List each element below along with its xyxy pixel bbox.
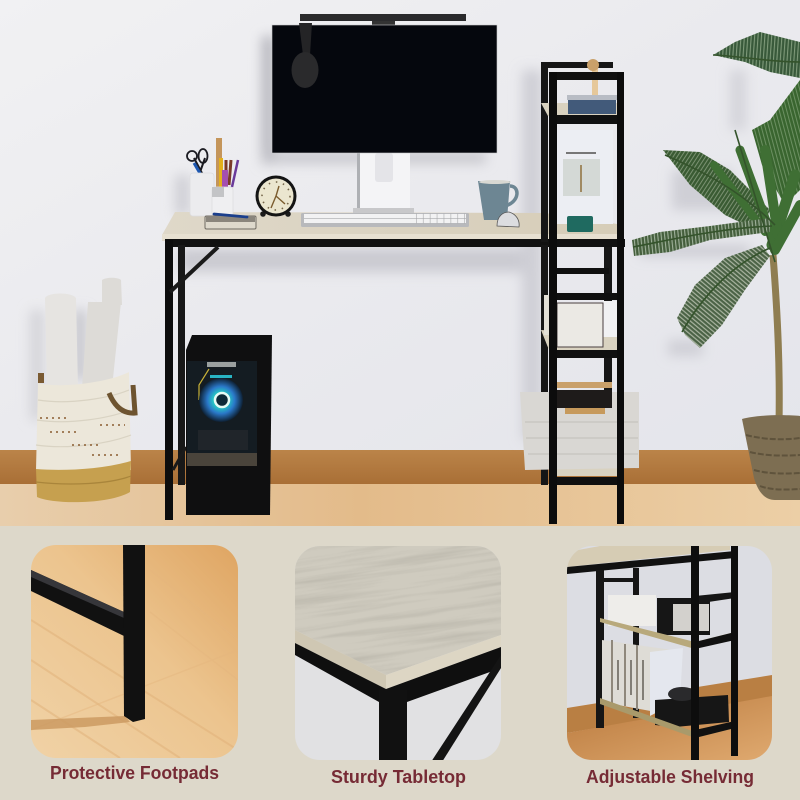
front rungs	[549, 72, 624, 485]
frond: top	[713, 32, 800, 78]
front legs	[549, 72, 557, 524]
white box	[608, 595, 656, 626]
wood front edge	[295, 630, 386, 689]
wood grain	[295, 546, 501, 670]
wall	[567, 546, 772, 708]
desk front edge	[162, 234, 617, 240]
top shelf books and ornament	[567, 59, 617, 114]
lower shelf	[600, 698, 735, 738]
floor	[567, 696, 772, 760]
shelf wood boards	[541, 103, 617, 476]
panel: protective footpads	[31, 545, 238, 758]
desk apron	[165, 239, 625, 247]
frond: upper right	[752, 80, 800, 205]
frond: center blades	[714, 150, 800, 250]
caption: adjustable shelving: Adjustable Shelving	[586, 767, 754, 787]
wall shadows	[30, 36, 750, 440]
baseboard	[0, 450, 800, 484]
back legs and rails	[596, 568, 735, 728]
keyboard	[301, 208, 469, 227]
monitor	[272, 25, 497, 153]
wall	[0, 0, 800, 451]
small desk ornament	[497, 212, 519, 227]
white storage box	[544, 295, 617, 347]
notebook and pen	[205, 214, 256, 229]
frond: low left	[632, 218, 770, 256]
books	[602, 640, 683, 716]
monitor light bar	[300, 14, 466, 26]
caption: sturdy tabletop: Sturdy Tabletop	[331, 767, 466, 787]
back frame	[541, 62, 613, 485]
room scene photo	[0, 0, 800, 526]
coffee mug	[478, 180, 517, 220]
headphones	[292, 23, 318, 88]
desk left back leg	[178, 245, 185, 485]
frond stems	[633, 55, 800, 332]
monitor stand	[357, 153, 410, 211]
caption: protective footpads: Protective Footpads	[50, 763, 219, 783]
trunk	[773, 255, 779, 425]
wood floor close-up	[31, 545, 238, 758]
panel: adjustable shelving	[567, 546, 772, 760]
black box	[657, 598, 710, 635]
rolled paper tubes	[45, 278, 122, 388]
diagonal brace	[432, 668, 501, 760]
rope basket	[36, 372, 135, 502]
desktop wood	[567, 546, 730, 567]
woven pot	[742, 415, 800, 500]
wood floor	[0, 484, 800, 526]
black apron	[567, 551, 735, 574]
front legs	[691, 546, 699, 760]
frond: upper left	[663, 150, 770, 232]
potted palm plant	[632, 32, 800, 500]
desk left front leg	[165, 240, 173, 520]
leg	[379, 702, 407, 760]
upper shelf	[600, 618, 735, 649]
wood top face	[295, 546, 501, 675]
leg shadow	[31, 716, 130, 730]
PC case	[186, 335, 272, 515]
frond: drooping	[677, 245, 770, 348]
fabric storage bin	[520, 382, 639, 470]
pen holder	[187, 138, 238, 216]
black box with figurine	[655, 687, 729, 727]
shelf unit	[520, 59, 639, 524]
baseboard	[567, 675, 772, 733]
vertical leg	[123, 545, 145, 722]
black apron	[295, 643, 501, 702]
poster book	[557, 130, 613, 232]
cross beam	[31, 570, 124, 636]
desktop surface	[162, 212, 617, 241]
desk brace	[170, 247, 218, 292]
panel: sturdy tabletop	[295, 546, 501, 760]
desk clock	[256, 176, 296, 217]
lower brace	[173, 447, 186, 470]
wall	[295, 655, 501, 760]
